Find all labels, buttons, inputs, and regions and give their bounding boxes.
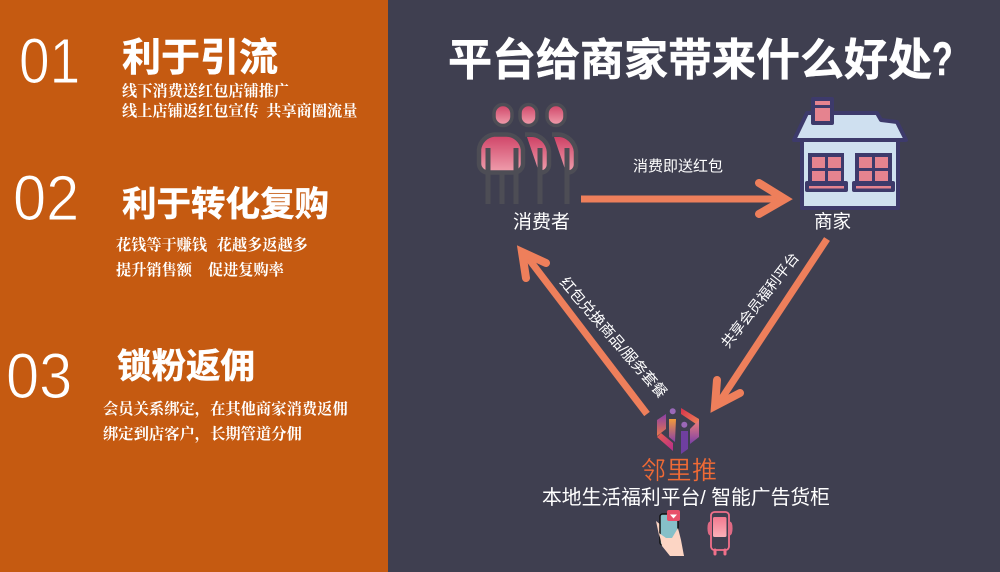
benefit 01	[19, 25, 357, 120]
number 02: 02	[13, 162, 79, 234]
heading: 利于引流: 利于引流	[122, 37, 278, 80]
heading: 锁粉返佣: 锁粉返佣	[117, 348, 255, 386]
logo text: 邻里推	[641, 457, 717, 485]
text: 03 description: 会员关系绑定，在其他商家消费返佣 绑定到店客户，长期管道分佣	[103, 401, 348, 443]
arrow: consumer to merchant	[581, 183, 785, 214]
icon: platform logo	[657, 408, 699, 454]
panel: left benefits	[0, 0, 388, 572]
benefit 02	[13, 162, 329, 279]
consumer front figure	[479, 134, 523, 172]
benefit 03	[6, 340, 348, 443]
consumer middle figure	[527, 137, 549, 172]
number 01: 01	[19, 25, 80, 97]
number 03: 03	[6, 340, 72, 412]
text: 01 description: 线下消费送红包店铺推广 线上店铺返红包宣传 共享商圈流量	[122, 83, 357, 120]
arrow: platform to consumer	[522, 252, 647, 414]
arrow: merchant to platform	[715, 239, 827, 406]
title: 平台给商家带来什么好处	[448, 36, 932, 85]
heading: 利于转化复购: 利于转化复购	[122, 186, 329, 224]
label: top arrow: 消费即送红包	[633, 158, 723, 175]
icon: consumers	[479, 104, 576, 204]
label: left arrow: 红包兑换商品/服务套餐	[556, 274, 669, 401]
label: merchant: 商家	[814, 211, 851, 232]
icon: merchant house	[794, 99, 906, 208]
text: 02 description: 花钱等于赚钱 花越多返越多 提升销售额 促进复购率	[116, 237, 308, 279]
label: right arrow: 共享会员福利平台	[719, 250, 803, 351]
icon: smart cabinet	[708, 512, 732, 554]
label: consumers: 消费者	[513, 212, 570, 233]
consumer back figure	[554, 137, 576, 172]
title: ?	[932, 32, 953, 85]
platform tagline: 本地生活福利平台/ 智能广告货柜	[542, 487, 830, 509]
icon: phone in hand	[656, 510, 684, 556]
